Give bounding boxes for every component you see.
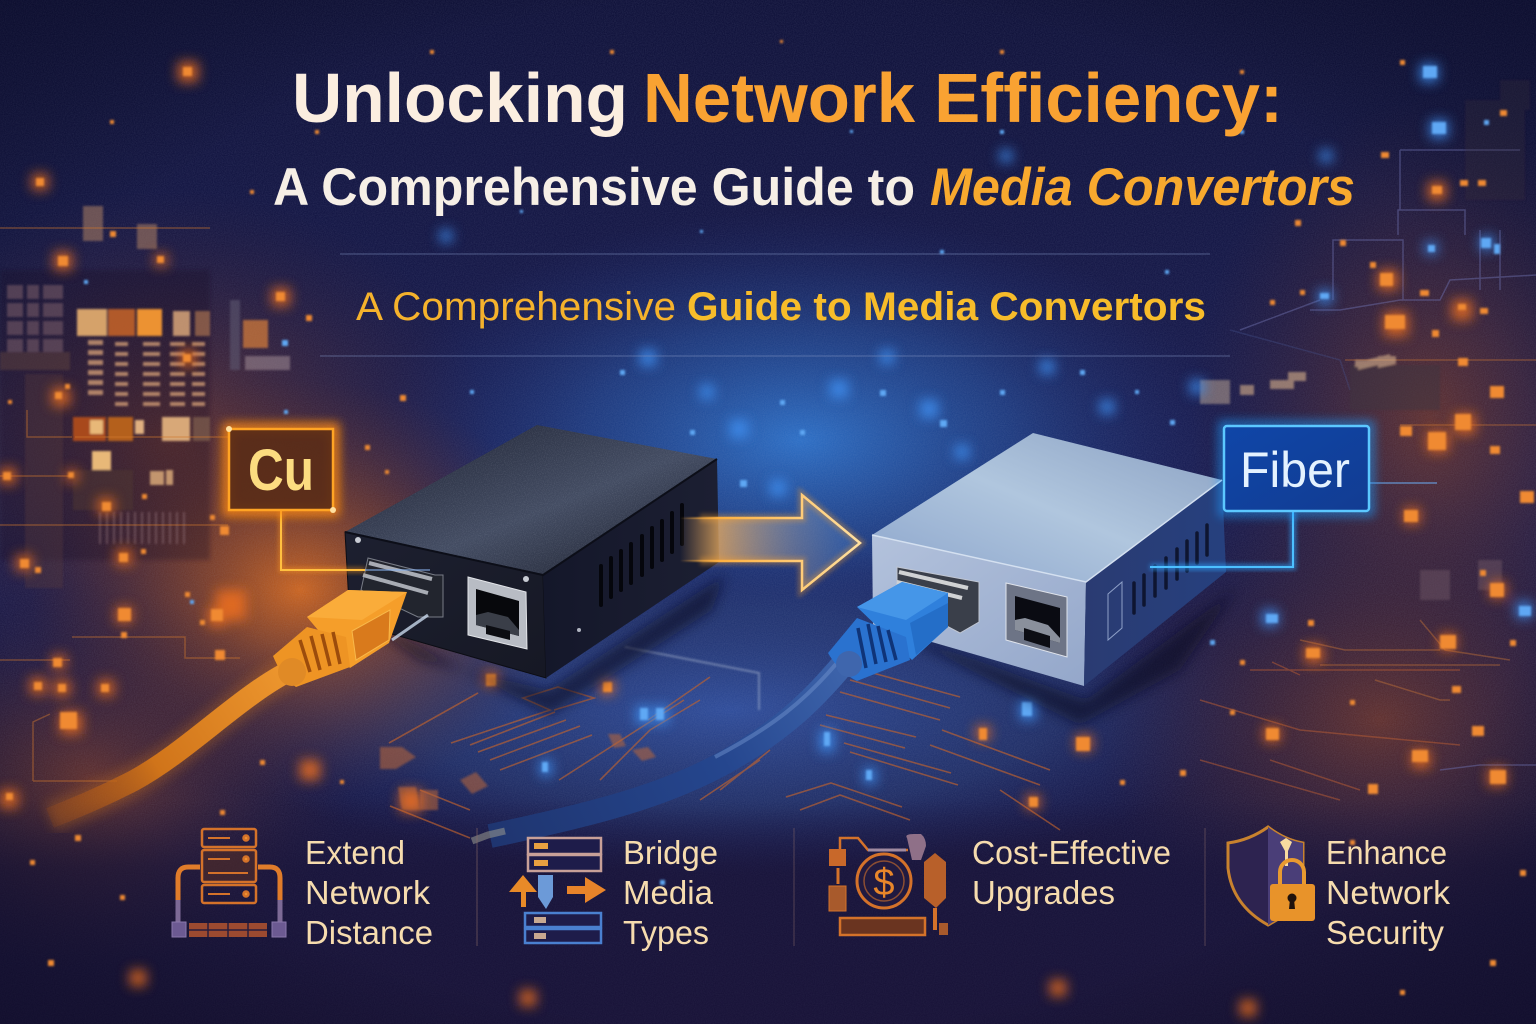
device: copper media converter — [340, 425, 725, 715]
label: Fiber — [1150, 425, 1437, 567]
text: Types — [623, 914, 709, 951]
text: Upgrades — [972, 874, 1115, 911]
label: Cu — [226, 426, 430, 570]
RJ45 port — [468, 577, 527, 649]
subtitle band: Guide to Media Convertors — [687, 285, 1206, 329]
plug: blue — [828, 582, 948, 681]
text: Network — [305, 874, 431, 911]
feature: extend network distance — [172, 829, 433, 951]
text: Bridge — [623, 834, 718, 871]
feature: cost-effective upgrades — [829, 834, 1171, 935]
divider — [1204, 828, 1206, 946]
text: Media — [623, 874, 714, 911]
feature: bridge media types — [509, 834, 718, 951]
icon: dollar machine — [829, 834, 948, 935]
background: right blocks — [1200, 80, 1530, 600]
icon: shield and lock — [1228, 827, 1315, 925]
background: server rack left — [0, 206, 290, 588]
SFP cage — [897, 567, 979, 633]
text — [972, 834, 1171, 911]
SFP cage — [361, 558, 443, 617]
text: Security — [1326, 914, 1444, 951]
title line 1: Network Efficiency: — [643, 59, 1283, 137]
cable: orange — [50, 668, 295, 818]
text — [1326, 834, 1451, 951]
text — [305, 834, 433, 951]
text: Distance — [305, 914, 433, 951]
floor accents — [380, 647, 759, 810]
title line 2: A Comprehensive Guide to — [273, 158, 915, 217]
top face — [872, 433, 1222, 582]
feature: enhance network security — [1228, 827, 1451, 951]
label: Fiber: Fiber — [1240, 442, 1350, 498]
text — [623, 834, 718, 951]
subtitle band: A Comprehensive — [356, 285, 676, 329]
plug: orange — [273, 590, 428, 687]
icon: servers with links — [172, 829, 286, 937]
icon: dollar machine: $ — [873, 862, 895, 904]
title line 2 — [273, 158, 1355, 217]
text: Cost-Effective — [972, 834, 1171, 871]
floor circuit traces — [389, 670, 1060, 838]
arrow: copper to fiber — [680, 495, 860, 590]
icon: servers and arrows — [509, 838, 606, 943]
text: Enhance — [1326, 834, 1447, 871]
background: traces and structures — [0, 150, 1536, 800]
title line 2: Media Convertors — [930, 158, 1355, 217]
divider — [476, 828, 478, 946]
cable: blue — [472, 652, 848, 841]
subtitle band — [320, 254, 1230, 356]
title line 1: Unlocking — [292, 59, 628, 137]
device: fiber media converter — [872, 433, 1235, 725]
top face — [345, 425, 717, 575]
label: Cu: Cu — [248, 438, 314, 503]
text: Extend — [305, 834, 405, 871]
RJ45 port — [1006, 583, 1067, 657]
divider — [793, 828, 795, 946]
title line 1 — [292, 59, 1283, 137]
text: Network — [1326, 874, 1451, 911]
